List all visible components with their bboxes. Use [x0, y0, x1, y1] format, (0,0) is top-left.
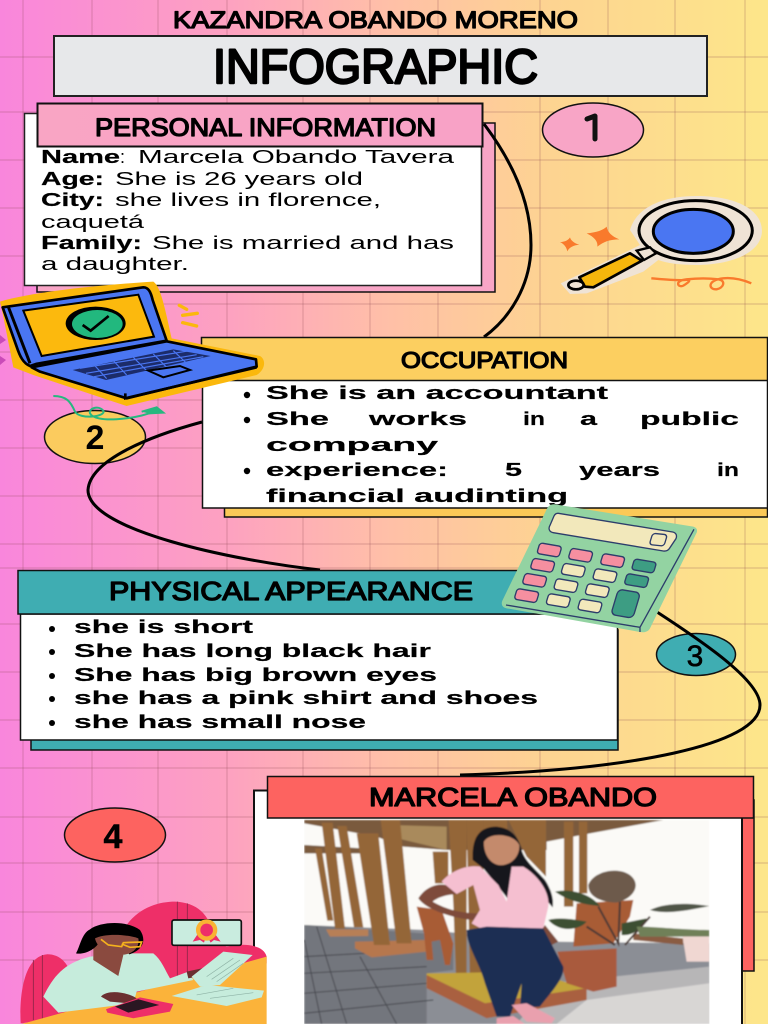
- physical appearance heading: PHYSICAL APPEARANCE: [109, 576, 473, 606]
- occupation list: in: [717, 459, 739, 480]
- icon: laptop: [0, 282, 264, 406]
- occupation list: [244, 382, 739, 506]
- occupation heading: [202, 338, 768, 380]
- physical appearance heading: [18, 570, 608, 614]
- photo: chairs: [417, 907, 453, 965]
- personal information text: Family:: [41, 233, 142, 253]
- photo: potted plant: [557, 948, 617, 992]
- occupation list: She is an accountant: [266, 382, 608, 403]
- icon: left arrows: [0, 335, 6, 365]
- photo of Marcela Obando: [304, 820, 709, 1024]
- illustration: accountant at desk: [20, 902, 267, 1024]
- badge 1: [542, 103, 644, 157]
- occupation list: company: [266, 434, 440, 455]
- physical appearance list: [49, 616, 538, 732]
- occupation list: 5: [505, 459, 522, 480]
- personal information heading: [38, 104, 482, 146]
- panel: personal information: [24, 104, 495, 292]
- panel: portrait: [254, 776, 754, 1024]
- personal information text: She is married and has: [152, 233, 454, 253]
- personal information text: Age:: [41, 169, 104, 189]
- title banner: [54, 36, 707, 96]
- illustration: calculator: [106, 997, 173, 1018]
- occupation heading: OCCUPATION: [401, 347, 568, 373]
- occupation list: She: [266, 408, 329, 429]
- panel: physical appearance: [18, 570, 618, 750]
- icon: calculator: [502, 504, 697, 632]
- illustration: woman: [43, 923, 210, 1013]
- physical appearance list: She has big brown eyes: [74, 664, 437, 685]
- badge 3: [656, 634, 736, 676]
- photo: bamboo columns: [315, 820, 587, 983]
- physical appearance list: She has long black hair: [74, 640, 431, 661]
- personal information text: :: [120, 147, 125, 167]
- illustration: papers: [172, 952, 264, 1006]
- personal information text: [41, 147, 456, 274]
- portrait heading: [268, 776, 754, 818]
- photo: ceiling: [304, 820, 663, 850]
- icon: magnifying glass: [560, 196, 762, 294]
- portrait heading: MARCELA OBANDO: [369, 782, 657, 812]
- personal information heading: PERSONAL INFORMATION: [95, 114, 436, 142]
- badge 4: [64, 808, 166, 862]
- personal information text: Name: [41, 147, 120, 167]
- icon: green squiggle arrow: [53, 396, 163, 419]
- panel: occupation: [202, 338, 768, 517]
- illustration: red background shapes: [20, 902, 267, 1023]
- connector curve 2: [88, 422, 320, 570]
- occupation list: in: [523, 408, 545, 429]
- occupation list: works: [367, 408, 467, 429]
- photo: woman: [473, 827, 553, 907]
- illustration: desk: [22, 957, 267, 1024]
- connector curve 1: [484, 124, 531, 337]
- physical appearance list: she is short: [74, 616, 253, 637]
- occupation list: years: [579, 459, 660, 480]
- badge 2: [44, 410, 146, 464]
- personal information text: City:: [41, 190, 104, 210]
- badge 3: 3: [687, 640, 703, 673]
- badge 4: 4: [104, 818, 123, 856]
- title banner: INFOGRAPHIC: [213, 41, 538, 94]
- personal information text: Marcela Obando Tavera: [138, 147, 456, 167]
- personal information text: a daughter.: [41, 254, 189, 274]
- occupation list: public: [640, 408, 739, 429]
- author name: KAZANDRA OBANDO MORENO: [173, 7, 578, 34]
- occupation list: experience:: [266, 459, 448, 480]
- physical appearance list: she has a pink shirt and shoes: [74, 687, 538, 708]
- personal information text: she lives in florence,: [115, 190, 381, 210]
- occupation list: a: [580, 408, 598, 429]
- occupation list: financial audinting: [266, 485, 568, 506]
- connector curve 3: [460, 612, 760, 775]
- personal information text: caquetá: [41, 212, 146, 232]
- personal information text: She is 26 years old: [115, 169, 363, 189]
- badge 2: 2: [86, 419, 104, 457]
- illustration: certificate: [172, 919, 241, 945]
- physical appearance list: she has small nose: [74, 711, 366, 732]
